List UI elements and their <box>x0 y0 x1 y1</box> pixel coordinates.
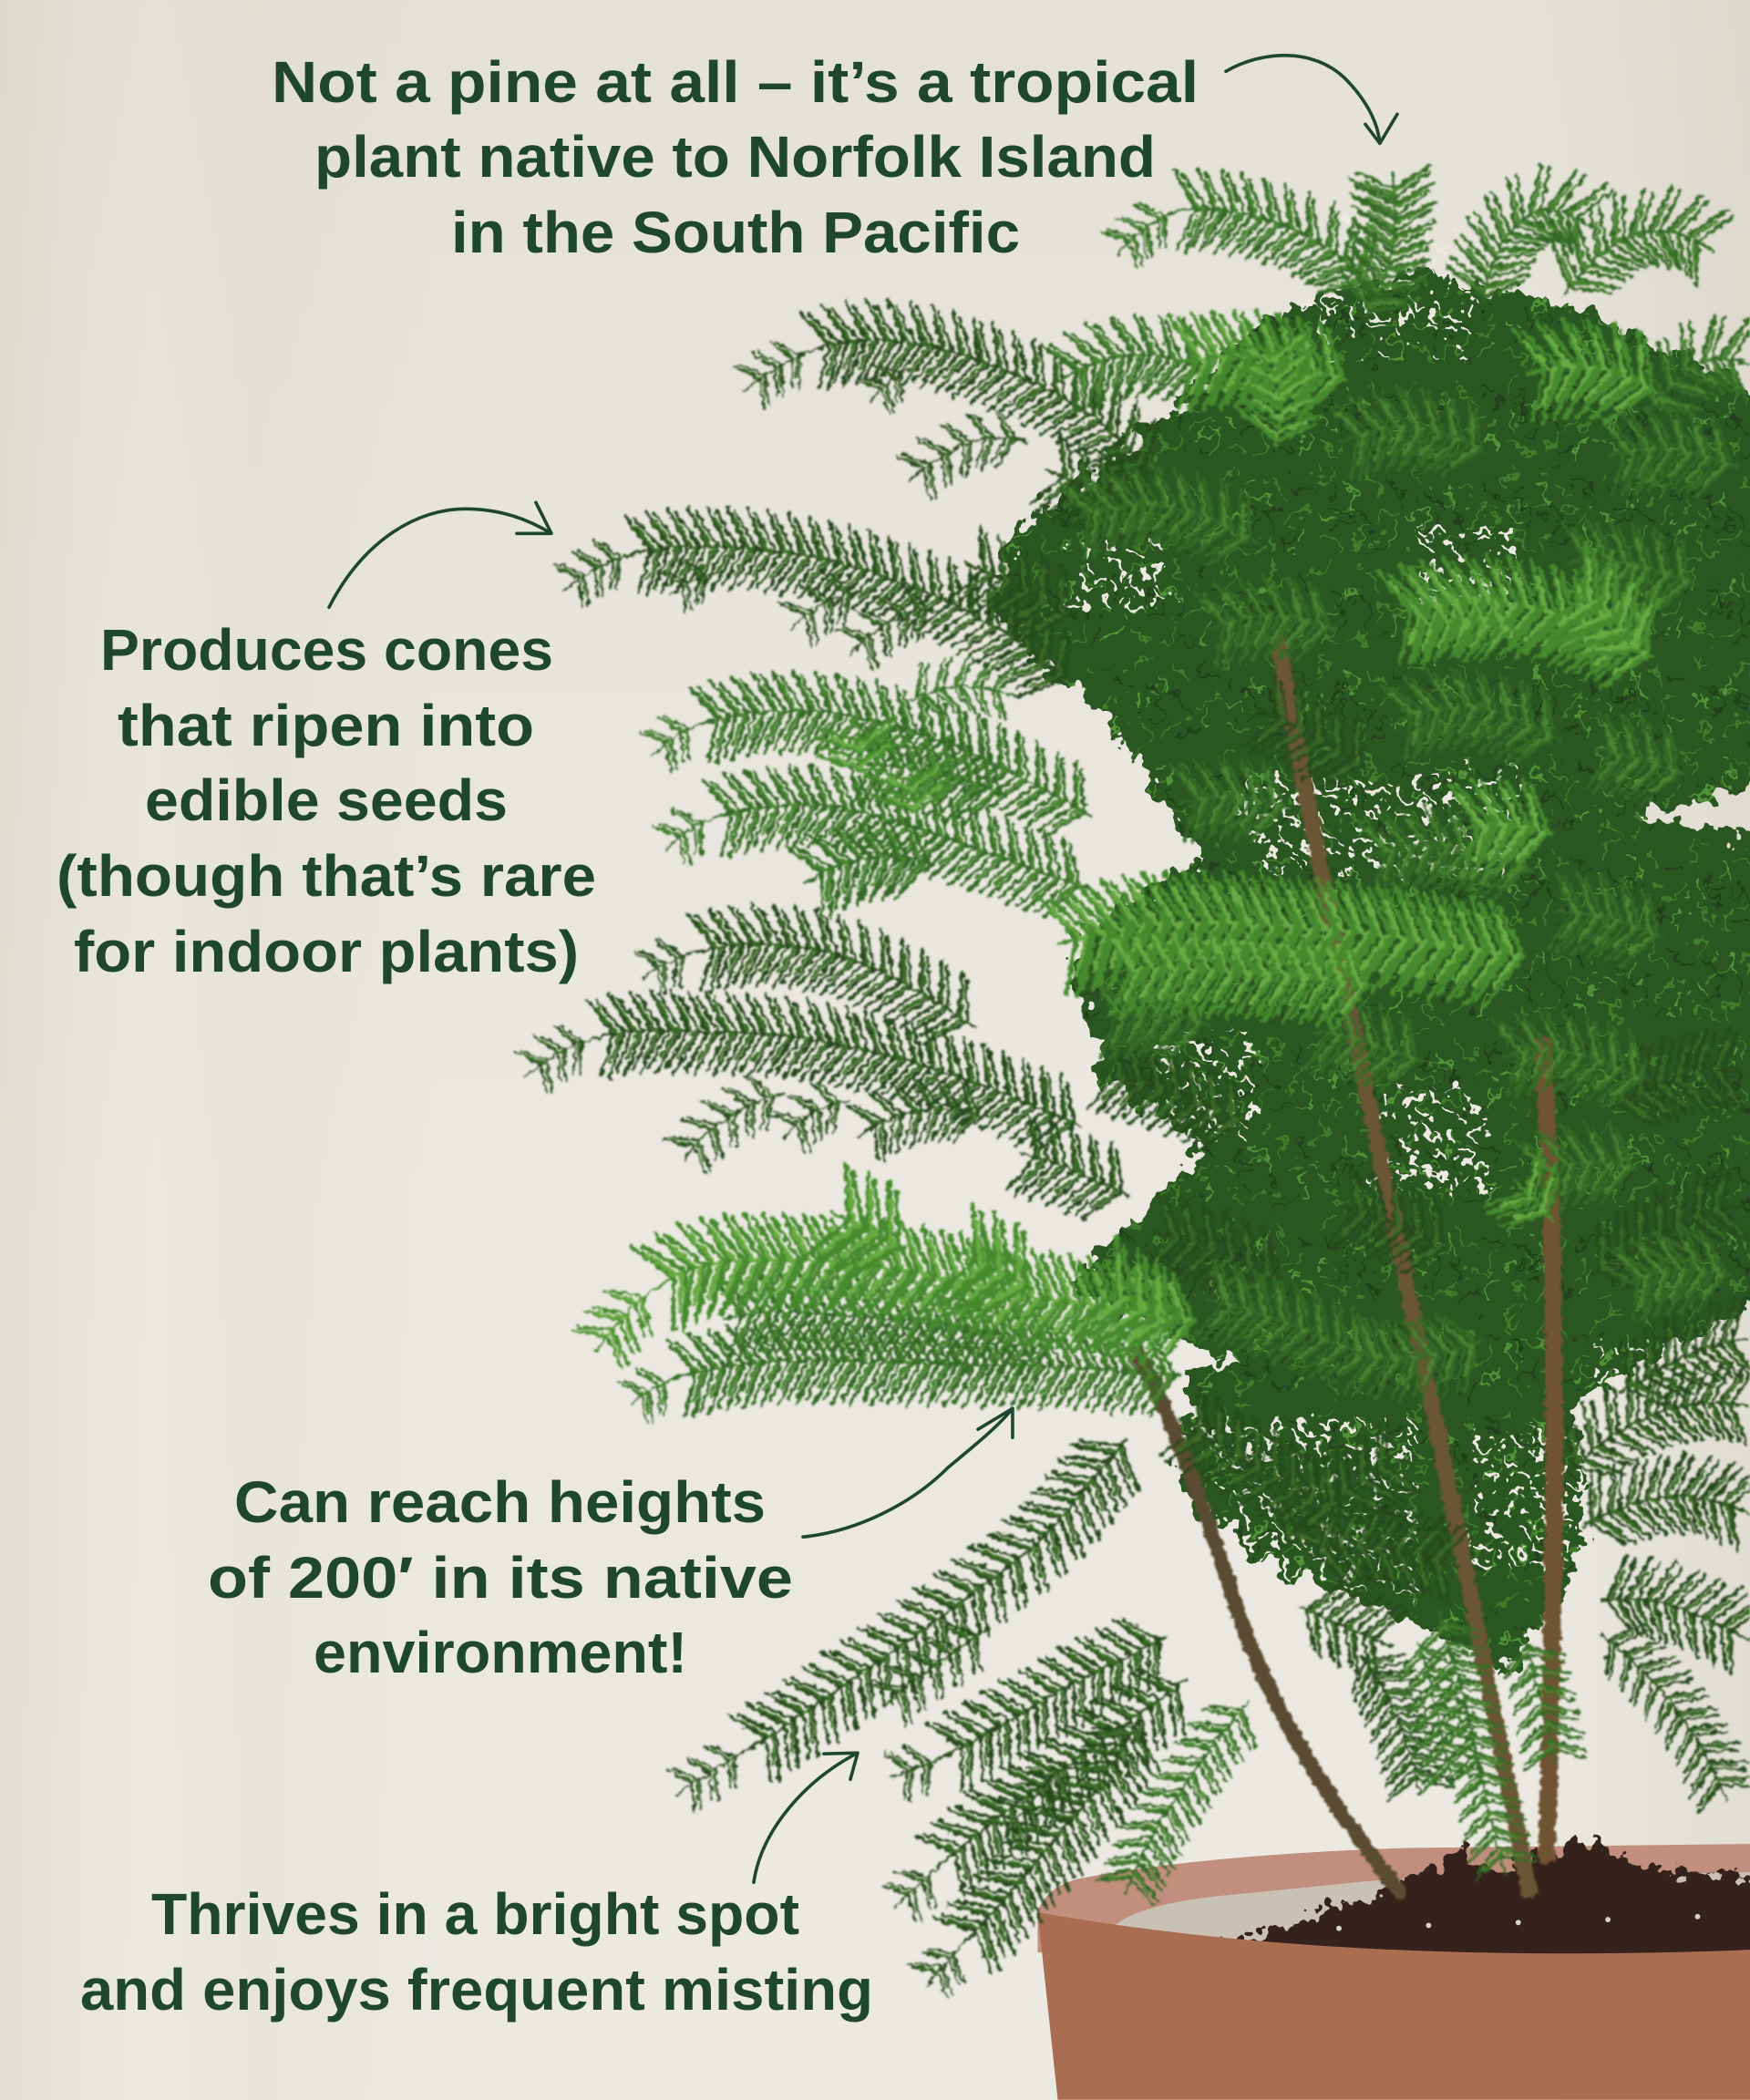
arrow: top callout <box>1226 56 1397 143</box>
callout: cones: edible seeds <box>145 767 508 833</box>
lower interior mass <box>1179 1366 1580 1674</box>
dark lower and left branches <box>525 340 1750 1986</box>
callout: light and misting: Thrives in a bright spot <box>151 1881 799 1947</box>
terracotta pot <box>1037 1838 1750 2100</box>
callout: height: Can reach heights <box>234 1469 766 1535</box>
callout: cones: Produces cones <box>100 617 553 683</box>
gaps: speckled wall through needles <box>1071 228 1687 1607</box>
foliage mass with needle texture <box>991 228 1750 1674</box>
callout: not a pine: Not a pine at all – it’s a tropical <box>272 49 1199 115</box>
arrow: height callout <box>803 1408 1013 1537</box>
callout: cones <box>57 617 596 984</box>
callout: not a pine: in the South Pacific <box>451 200 1020 265</box>
pot inner wall <box>1111 1872 1750 1952</box>
pot rim <box>1037 1844 1750 1952</box>
pot body <box>1037 1912 1750 2100</box>
bright green branches <box>596 335 1658 1353</box>
upper and middle mass <box>991 268 1750 1419</box>
callout: not a pine: plant native to Norfolk Island <box>314 124 1156 190</box>
callout: light and misting: and enjoys frequent misting <box>80 1957 873 2023</box>
callout: height <box>208 1469 793 1685</box>
callout: light and misting <box>80 1881 873 2023</box>
callout: cones: that ripen into <box>118 693 534 758</box>
soil perlite <box>1339 1915 1750 1929</box>
arrow: cones callout <box>329 502 551 607</box>
callout: height: environment! <box>314 1620 687 1685</box>
callout: cones: for indoor plants) <box>74 919 579 984</box>
foliage branches and trunks <box>525 171 1750 1986</box>
callout: height: of 200′ in its native <box>208 1545 793 1611</box>
arrow: misting callout <box>754 1753 858 1882</box>
mid green branches <box>629 171 1750 1895</box>
trunks <box>1138 643 1554 1891</box>
soil <box>1185 1838 1750 1982</box>
callout: not a pine <box>272 49 1199 265</box>
callout: cones: (though that’s rare <box>57 843 596 909</box>
